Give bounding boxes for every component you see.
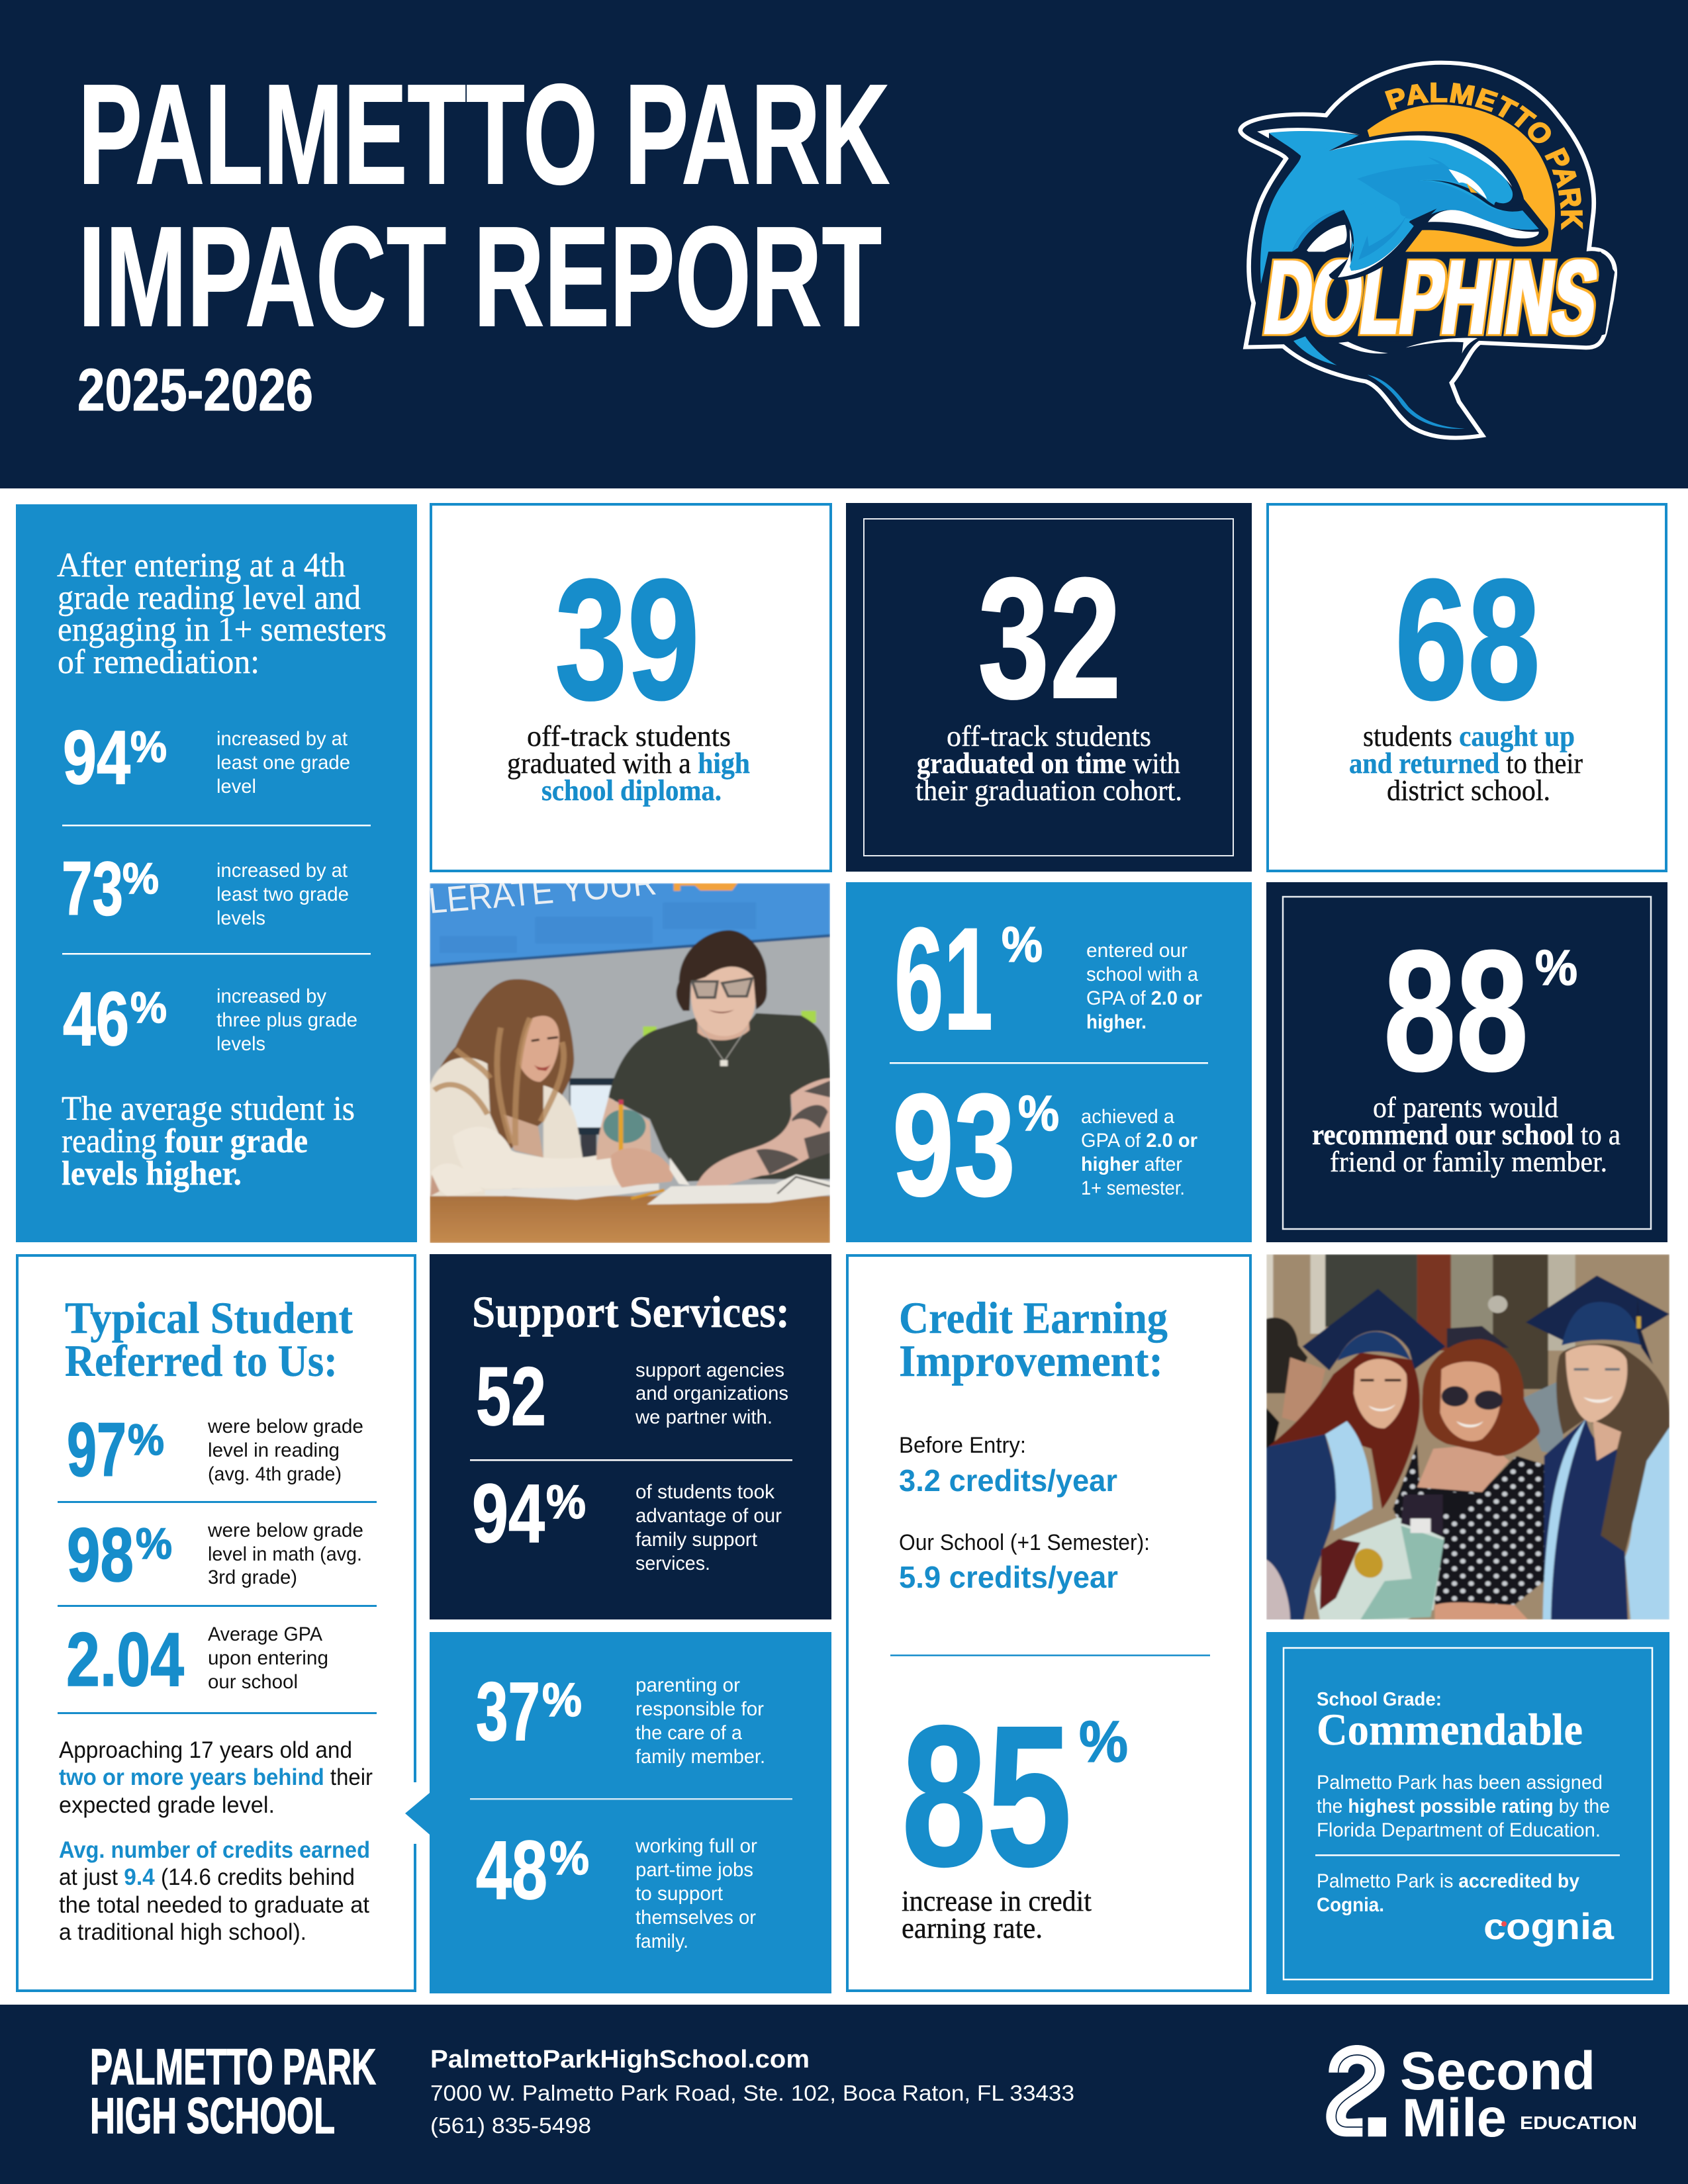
panel: 68 caught up xyxy=(1268,504,1666,871)
rating text: the highest possible rating by the xyxy=(1317,1796,1613,1817)
panel: 68 caught up: students caught up xyxy=(1363,720,1583,752)
stat: 46% xyxy=(63,977,357,1062)
stat: 73%: least two grade xyxy=(216,884,349,905)
accreditation text: Palmetto Park is accredited by xyxy=(1317,1870,1587,1892)
school grade heading: Commendable xyxy=(1317,1704,1583,1754)
stat: 85%: % xyxy=(1079,1709,1128,1774)
stat: 94%: % xyxy=(546,1477,586,1529)
panel: student responsibilities xyxy=(405,1632,831,1993)
stat: 98%: 3rd grade) xyxy=(208,1567,297,1588)
panel: 88% parents: of parents would xyxy=(1373,1091,1558,1124)
stat: 48% xyxy=(476,1825,757,1952)
intro text: grade reading level and xyxy=(58,579,361,617)
stat: 2.04: upon entering xyxy=(208,1647,328,1669)
stat: 94%: level xyxy=(216,776,256,797)
logo: Cognia: cognia xyxy=(1483,1905,1615,1947)
stat: 73%: increased by at xyxy=(216,860,348,882)
stat: 85%: earning rate. xyxy=(902,1912,1043,1944)
stat: 48%: working full or xyxy=(635,1835,757,1857)
closing text: The average student is xyxy=(62,1090,355,1128)
school grade heading: School Grade: xyxy=(1317,1689,1442,1710)
stat: 94%: increased by at xyxy=(216,728,348,750)
stat: 48%: part-time jobs xyxy=(635,1859,753,1881)
panel heading: Support Services: xyxy=(472,1287,790,1337)
panel: 88% parents: recommend our school to a xyxy=(1312,1118,1624,1151)
stat: 93%: 93 xyxy=(892,1064,1015,1226)
stat: 93% xyxy=(892,1064,1197,1226)
stat: 46%: 46 xyxy=(63,977,129,1062)
stat: 61%: school with a xyxy=(1086,964,1198,985)
our school rate: 5.9 credits/year xyxy=(899,1560,1118,1594)
stat: 94%: 94 xyxy=(63,715,130,800)
intro text: engaging in 1+ semesters xyxy=(58,611,387,649)
stat: 2.04 xyxy=(66,1617,328,1702)
footer school name: HIGH SCHOOL xyxy=(90,2088,335,2144)
stat: 94%: services. xyxy=(635,1553,710,1574)
stat: 61%: GPA of 2.0 or xyxy=(1086,987,1204,1009)
panel: GPA stats xyxy=(846,882,1252,1242)
stat: 98%: level in math (avg. xyxy=(208,1543,362,1565)
panel: 68 caught up: district school. xyxy=(1387,774,1550,807)
panel: 88% parents: 88 xyxy=(1383,915,1528,1107)
stat: 37%: 37 xyxy=(476,1666,540,1758)
stat: 46%: levels xyxy=(216,1033,265,1055)
panel: 39 graduates: off-track students xyxy=(527,720,731,752)
rating text: Palmetto Park has been assigned xyxy=(1317,1772,1603,1794)
footer band xyxy=(0,2005,1688,2184)
stat: 37%: responsible for xyxy=(635,1698,764,1720)
stat: 61% xyxy=(894,897,1202,1060)
stat: 97%: level in reading xyxy=(208,1439,340,1461)
stat: 37%: parenting or xyxy=(635,1674,740,1696)
before entry rate xyxy=(899,1433,1117,1498)
panel: 88% parents: % xyxy=(1535,940,1577,995)
stat: 52 xyxy=(476,1351,788,1443)
photo: teacher and student at table xyxy=(426,862,830,1243)
header banner xyxy=(0,0,1688,488)
stat: 93%: 1+ semester. xyxy=(1081,1177,1185,1199)
closing text: levels higher. xyxy=(62,1155,242,1193)
panel: 32 graduates: off-track students xyxy=(947,720,1151,752)
stat: 37% xyxy=(476,1666,765,1768)
panel: 32 graduates: graduated on time with xyxy=(917,747,1185,780)
stat: 93%: achieved a xyxy=(1081,1106,1174,1128)
panel: 32 graduates: 32 xyxy=(978,543,1121,735)
stat: 73% xyxy=(62,846,349,931)
stat: 94%: % xyxy=(130,722,167,771)
stat: 46%: three plus grade xyxy=(216,1009,357,1031)
stat: 61%: higher. xyxy=(1086,1011,1147,1033)
panel: 32 graduates xyxy=(846,503,1252,872)
stat: 37%: % xyxy=(542,1674,582,1727)
panel: school grade xyxy=(1266,1632,1669,1994)
age note: two or more years behind their xyxy=(59,1764,376,1790)
stat: 98% xyxy=(67,1513,363,1598)
stat: 73%: levels xyxy=(216,907,265,929)
footer contact xyxy=(430,2046,1074,2138)
stat: 2.04: 2.04 xyxy=(66,1617,184,1702)
age note: Approaching 17 years old and xyxy=(59,1737,352,1763)
stat: 98%: % xyxy=(136,1519,172,1568)
stat: 48%: 48 xyxy=(476,1825,547,1917)
stat: 85%: increase in credit xyxy=(902,1885,1092,1917)
stat: 97%: % xyxy=(128,1415,164,1464)
stat: 93%: % xyxy=(1018,1085,1059,1141)
photo: graduates with bouquet xyxy=(1266,1254,1669,1619)
stat: 98%: were below grade xyxy=(207,1520,363,1541)
stat: 2.04: Average GPA xyxy=(208,1623,322,1645)
our school rate xyxy=(899,1530,1150,1594)
footer school name: PALMETTO PARK xyxy=(90,2039,376,2095)
before entry rate: Before Entry: xyxy=(899,1433,1026,1458)
footer contact: PalmettoParkHighSchool.com xyxy=(430,2046,810,2073)
stat: 61%: 61 xyxy=(894,897,993,1060)
logo: Second Mile Education: Second xyxy=(1400,2041,1595,2101)
credits note: at just 9.4 (14.6 credits behind xyxy=(59,1864,365,1890)
panel: 88% parents xyxy=(1266,882,1667,1242)
stat: 94%: least one grade xyxy=(216,752,350,774)
stat: 97% xyxy=(67,1408,363,1492)
panel heading: Typical Student xyxy=(65,1293,353,1343)
logo: Second Mile Education: EDUCATION xyxy=(1520,2113,1637,2133)
credits note: a traditional high school). xyxy=(59,1919,306,1945)
year: 2025-2026 xyxy=(77,357,313,424)
stat: 94%: of students took xyxy=(635,1481,775,1503)
stat: 46%: % xyxy=(130,983,167,1032)
panel heading: Improvement: xyxy=(899,1336,1163,1386)
stat: 48%: to support xyxy=(635,1883,724,1905)
stat: 48%: family. xyxy=(635,1931,688,1952)
panel: 39 graduates xyxy=(431,504,831,871)
logo: Second Mile Education xyxy=(1326,2041,1637,2148)
intro text: After entering at a 4th xyxy=(57,547,346,584)
stat: 94% xyxy=(63,715,350,800)
panel: 39 graduates: graduated with a high xyxy=(507,747,753,780)
photo banner lettering: LERATE YOUR xyxy=(426,862,659,921)
stat: 48%: % xyxy=(549,1833,589,1885)
stat: 97%: (avg. 4th grade) xyxy=(208,1463,342,1485)
panel: 68 caught up: 68 xyxy=(1395,544,1540,736)
stat: 94%: family support xyxy=(635,1529,758,1551)
panel heading: Referred to Us: xyxy=(65,1336,338,1386)
stat: 93%: higher after xyxy=(1081,1154,1184,1175)
logo: Second Mile Education: Mile xyxy=(1402,2088,1507,2148)
stat: 73%: 73 xyxy=(62,846,123,931)
stat: 93%: GPA of 2.0 or xyxy=(1081,1130,1199,1152)
stat: 37%: family member. xyxy=(635,1746,765,1768)
credits note: the total needed to graduate at xyxy=(59,1892,369,1918)
stat: 73%: % xyxy=(122,854,159,903)
stat: 2.04: our school xyxy=(208,1671,298,1693)
panel heading: Credit Earning xyxy=(899,1293,1168,1343)
credits note: Avg. number of credits earned xyxy=(59,1837,370,1863)
stat: 52: support agencies xyxy=(635,1359,784,1381)
panel: support services xyxy=(430,1254,831,1619)
intro text: of remediation: xyxy=(58,643,259,681)
panel: reading remediation xyxy=(16,504,417,1242)
stat: 46%: increased by xyxy=(216,985,326,1007)
stat: 98%: 98 xyxy=(67,1513,134,1598)
before entry rate: 3.2 credits/year xyxy=(899,1463,1117,1498)
stat: 97%: 97 xyxy=(67,1408,126,1492)
stat: 52: we partner with. xyxy=(635,1406,773,1428)
logo: Palmetto Park Dolphins: PALMETTO PARK xyxy=(1385,82,1583,230)
stat: 52: and organizations xyxy=(635,1383,788,1404)
age note: expected grade level. xyxy=(59,1792,275,1818)
stat: 85%: 85 xyxy=(902,1684,1072,1907)
panel: 88% parents: friend or family member. xyxy=(1330,1146,1607,1178)
logo: Palmetto Park Dolphins xyxy=(1238,61,1618,440)
panel: typical student referred xyxy=(17,1255,415,1991)
panel: 39 graduates: 39 xyxy=(555,544,700,736)
stat: 94%: 94 xyxy=(472,1468,545,1560)
our school rate: Our School (+1 Semester): xyxy=(899,1530,1150,1555)
stat: 61%: % xyxy=(1002,917,1043,972)
accreditation text: Cognia. xyxy=(1317,1894,1384,1916)
title: line 2: IMPACT REPORT xyxy=(78,197,882,356)
stat: 61%: entered our xyxy=(1086,940,1188,962)
title: line 1: PALMETTO PARK xyxy=(78,54,890,214)
panel: 39 graduates: school diploma. xyxy=(541,774,722,807)
footer contact: 7000 W. Palmetto Park Road, Ste. 102, Boca Raton, FL 33433 xyxy=(430,2081,1074,2105)
stat: 37%: the care of a xyxy=(635,1722,742,1744)
rating text: Florida Department of Education. xyxy=(1317,1819,1601,1841)
stat: 97%: were below grade xyxy=(207,1416,363,1437)
stat: 48%: themselves or xyxy=(635,1907,756,1929)
panel: 32 graduates: their graduation cohort. xyxy=(915,774,1182,807)
panel: credit earning improvement xyxy=(847,1255,1250,1991)
stat: 94% xyxy=(472,1468,782,1574)
footer contact: (561) 835-5498 xyxy=(430,2113,591,2138)
stat: 94%: advantage of our xyxy=(635,1505,782,1527)
panel: 68 caught up: and returned to their xyxy=(1349,747,1590,780)
stat: 52: 52 xyxy=(476,1351,546,1443)
closing text: reading four grade xyxy=(62,1122,320,1160)
